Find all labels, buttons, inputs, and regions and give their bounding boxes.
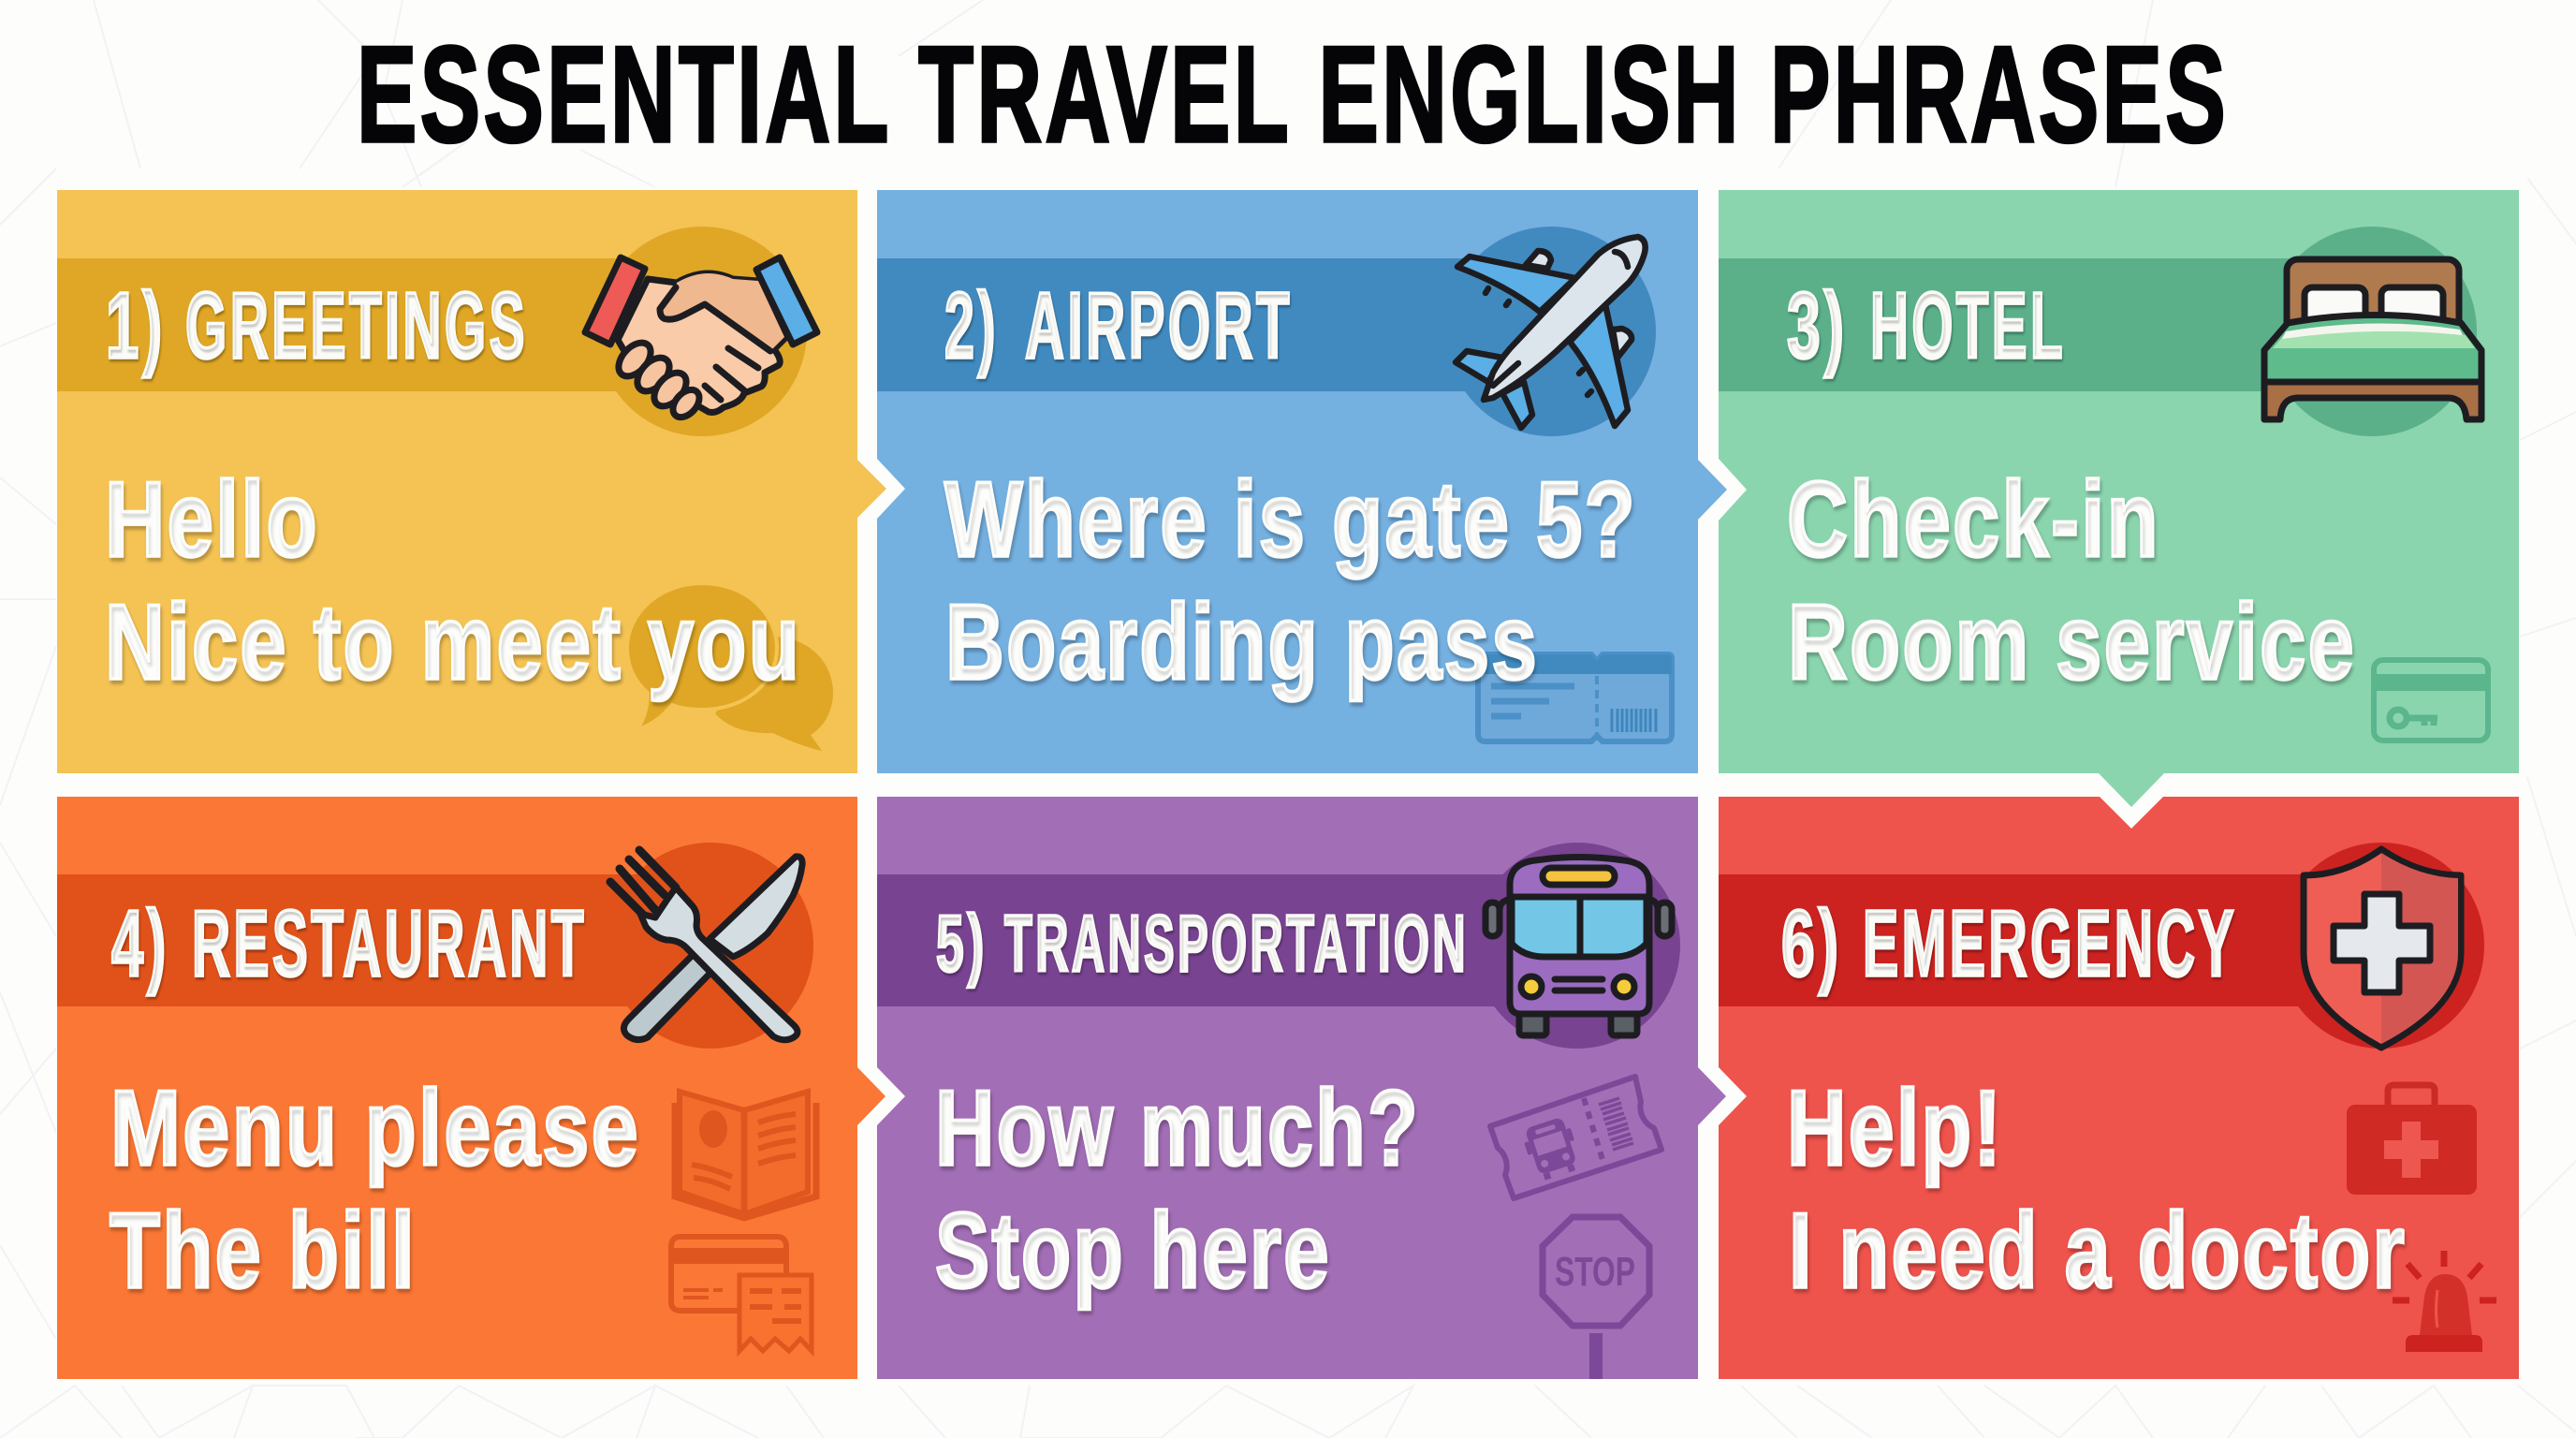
heading: hotel: 3) [1787, 273, 1848, 378]
icon: first aid kit [2347, 1085, 2477, 1195]
phrases: transportation: How much? [935, 1069, 1420, 1188]
phrases: hotel: Check-in [1787, 461, 2160, 580]
icon: fork and knife [610, 850, 802, 1040]
arrow: restaurant to transportation [857, 1067, 905, 1125]
heading: greetings: 1) [106, 273, 166, 378]
panel: emergency [1719, 797, 2519, 1379]
icon: stop sign [1543, 1217, 1649, 1379]
arrow: hotel to emergency [2099, 773, 2164, 829]
icon: siren [2393, 1251, 2496, 1352]
panel: transportation [877, 797, 1698, 1379]
phrases: greetings: Hello [105, 461, 319, 580]
icon: bus [1486, 858, 1672, 1035]
phrases: restaurant [110, 1069, 640, 1311]
heading: airport: AIRPORT [1025, 273, 1293, 378]
icon: bed [2264, 259, 2481, 419]
heading: restaurant: RESTAURANT [192, 891, 587, 996]
icon: bus ticket [1490, 1077, 1661, 1198]
heading: hotel [1787, 273, 2066, 378]
panel: airport [877, 190, 1698, 773]
heading: airport: 2) [944, 273, 999, 378]
icon: card and receipt [671, 1237, 812, 1351]
phrases: transportation: Stop here [935, 1192, 1331, 1311]
heading: emergency: 6) [1781, 891, 1842, 996]
phrases: greetings [105, 461, 801, 702]
heading: hotel: HOTEL [1870, 273, 2066, 378]
icon: key card [2374, 660, 2488, 741]
icon: medical shield [2304, 849, 2461, 1048]
heading: greetings [106, 273, 528, 378]
arrow: greetings to airport [857, 459, 905, 519]
heading: airport [944, 273, 1293, 378]
phrases: airport: Boarding pass [945, 583, 1539, 702]
phrases: greetings: Nice to meet you [105, 583, 801, 702]
phrases: restaurant: The bill [110, 1192, 417, 1311]
icon: menu [675, 1092, 816, 1218]
heading: transportation: TRANSPORTATION [1004, 900, 1469, 989]
heading: emergency [1781, 891, 2237, 996]
panel: hotel [1719, 190, 2519, 773]
phrases: emergency: Help! [1787, 1069, 2003, 1188]
heading: restaurant [111, 891, 587, 996]
panel: restaurant [57, 797, 857, 1379]
arrow: transportation to emergency [1698, 1067, 1747, 1125]
icon: boarding pass [1478, 654, 1672, 741]
icon: stop sign: STOP [1555, 1249, 1635, 1295]
icon: speech bubbles [627, 583, 833, 751]
heading: transportation [936, 900, 1469, 989]
heading: greetings: GREETINGS [185, 273, 528, 378]
icon: handshake [585, 257, 817, 422]
heading: emergency: EMERGENCY [1863, 891, 2237, 996]
icon: airplane [1456, 237, 1646, 428]
phrases: emergency: I need a doctor [1789, 1192, 2407, 1311]
phrases: hotel [1787, 461, 2356, 702]
phrases: airport [944, 461, 1637, 702]
heading: restaurant: 4) [111, 891, 169, 996]
phrases: hotel: Room service [1788, 583, 2356, 702]
phrases: emergency [1787, 1069, 2407, 1311]
panel: greetings [57, 190, 857, 773]
phrases: transportation [935, 1069, 1420, 1311]
arrow: airport to hotel [1698, 459, 1747, 521]
heading: transportation: 5) [936, 900, 988, 989]
phrases: airport: Where is gate 5? [944, 461, 1637, 580]
phrases: restaurant: Menu please [110, 1069, 640, 1188]
